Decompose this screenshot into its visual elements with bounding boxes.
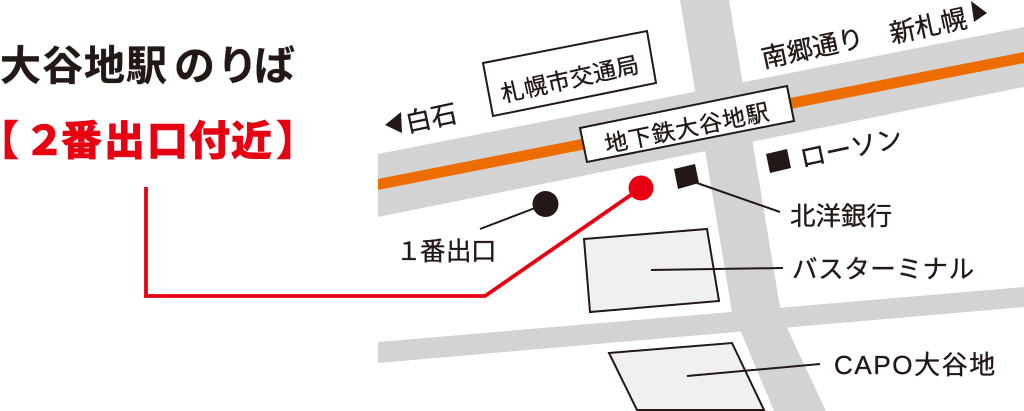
road: main east-west [378, 27, 1024, 217]
label: Shin-Sapporo: 新札幌 [887, 3, 969, 49]
arrow: to Shiroishi [385, 112, 402, 133]
marker: exit 1 [532, 191, 558, 217]
label: exit 1: １番出口 [396, 238, 497, 266]
station label [580, 86, 794, 162]
label: Lawson: ローソン [797, 123, 905, 174]
marker: exit 2 [628, 176, 654, 200]
road network [378, 0, 1024, 411]
building: transit bureau: 札幌市交通局 [499, 51, 642, 107]
label: CAPO: CAPO大谷地 [834, 350, 997, 380]
subway line [378, 52, 1024, 190]
building: bus terminal [584, 229, 719, 312]
leader line: CAPO [687, 364, 820, 376]
label: Nango street: 南郷通り [759, 23, 867, 74]
red walking route [146, 187, 641, 296]
station label: 地下鉄大谷地駅 [602, 99, 772, 158]
label: Hokuyo Bank: 北洋銀行 [790, 203, 892, 231]
road: lower east-west [378, 287, 1024, 363]
label: Shiroishi: 白石 [403, 98, 460, 138]
leader line: exit 1 [480, 208, 535, 229]
building: CAPO [609, 343, 764, 410]
icon: Hokuyo Bank [674, 164, 699, 189]
leader line: bus terminal [651, 268, 783, 270]
arrow: to Shin-Sapporo [971, 1, 987, 22]
building: transit bureau [483, 31, 656, 116]
icon: Lawson [766, 149, 791, 173]
road: north-south upper [680, 0, 826, 411]
title: 大谷地駅のりば [0, 32, 295, 92]
label: bus terminal: バスターミナル [792, 256, 975, 284]
leader line: Hokuyo Bank [697, 183, 780, 212]
